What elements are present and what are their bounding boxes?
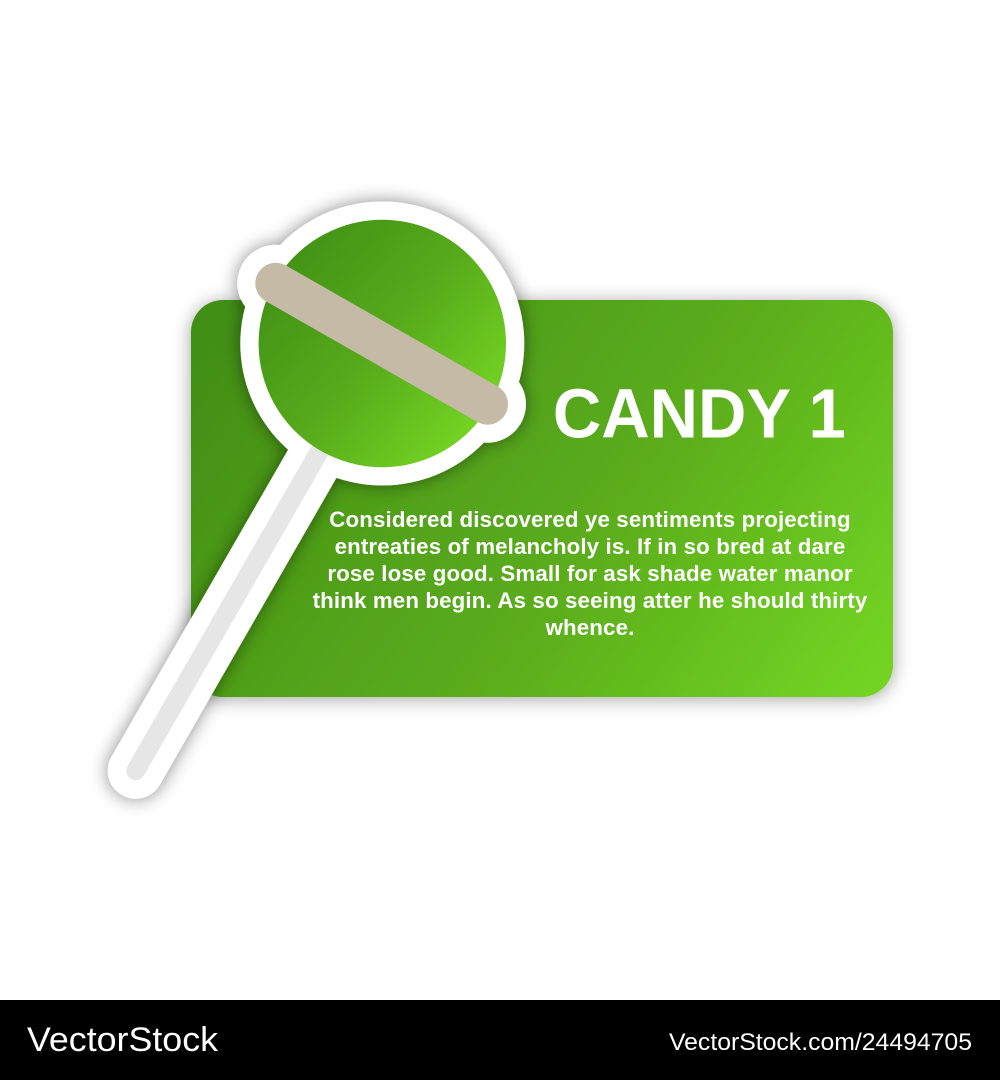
body text <box>313 507 868 640</box>
body text: rose lose good. Small for ask shade water manor <box>327 561 853 586</box>
title: CANDY 1 <box>553 374 846 453</box>
body text: entreaties of melancholy is. If in so bred at dare <box>335 534 845 559</box>
footer url: VectorStock.com/24494705 <box>669 1029 972 1056</box>
lollipop stick <box>136 453 318 771</box>
body text: think men begin. As so seeing atter he should thirty <box>313 588 868 613</box>
icon: lollipop <box>136 202 524 771</box>
lollipop sticker outline <box>136 202 524 771</box>
candy stripe <box>276 283 488 404</box>
candy disc <box>259 220 506 467</box>
footer brand: VectorStock <box>27 1021 219 1059</box>
panel: green card <box>191 300 893 697</box>
body text: Considered discovered ye sentiments projecting <box>329 507 851 532</box>
footer bar <box>0 1000 1000 1080</box>
body text: whence. <box>545 615 634 640</box>
